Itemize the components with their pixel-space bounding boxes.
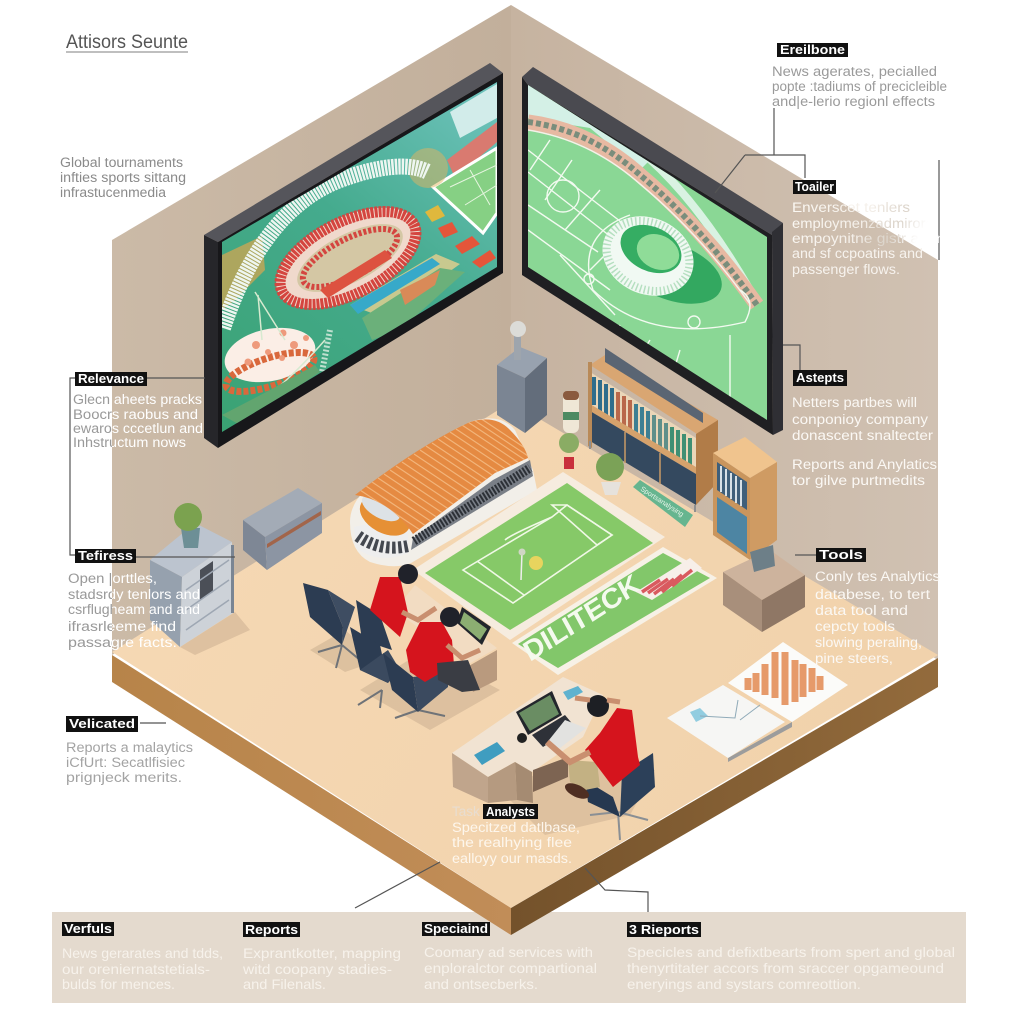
panel column: 3 Rieports: thenyrtitater accors from sraccer opgameound: [627, 960, 944, 976]
panel column: Verfuls: [62, 921, 223, 992]
floor shadows: [180, 612, 655, 835]
intro text: infrastucenmedia: [60, 185, 167, 200]
callout: Toailer: passenger flows.: [792, 262, 900, 277]
callout: Tools: [815, 547, 940, 666]
headset: [517, 733, 527, 743]
callout: Ereilbone: popte :tadiums of precicleible: [772, 79, 947, 94]
callout: Astepts: tor gilve purtmedits: [792, 473, 925, 488]
chair one: [303, 583, 360, 668]
bottom panel columns: [62, 921, 955, 992]
left wall screen: stadium artwork: [204, 63, 503, 448]
panel column: 3 Rieports: Specicles and defixtbearts from spert and global: [627, 944, 955, 960]
drawer cabinet with plant: [150, 503, 234, 647]
ring stadium: [656, 250, 722, 304]
chair: [585, 753, 655, 840]
left wall: [112, 5, 511, 655]
title: Attisors Seunte: [66, 32, 188, 53]
callout: Astepts: donascent snaltecter: [792, 428, 934, 443]
panel column: Reports: Exprantkotter, mapping: [243, 945, 401, 961]
callout: Ereilbone: Ereilbone: [780, 42, 845, 57]
callout: Astepts: [792, 370, 937, 488]
stand band: [528, 122, 757, 305]
tablet: [563, 686, 583, 700]
person two: [406, 607, 480, 692]
intro text: [60, 155, 186, 200]
callout: Toailer: Toailer: [795, 179, 834, 194]
chair two: [350, 600, 400, 708]
callout: Velicated: [66, 716, 193, 785]
callout: Toailer: and sf ccpoatins and: [792, 246, 923, 261]
lower dome: [224, 328, 316, 382]
callout: Tefiress: ifrasrleeme find: [68, 619, 176, 634]
green pitch mat: [413, 472, 665, 640]
white arc roof: [223, 167, 428, 328]
callout: Tefiress: Open |orttles,: [68, 571, 157, 586]
small orange courts: [438, 222, 458, 238]
callout: Tools: databese, to tert: [815, 587, 930, 602]
floor platform: [112, 402, 938, 935]
panel column: Verfuls: bulds for mences.: [62, 976, 175, 992]
chair three: [383, 653, 448, 718]
callout: Tools: slowing peraling,: [815, 635, 922, 650]
intro text: infties sports sittang: [60, 170, 186, 185]
panel column: 3 Rieports: eneryings and systars comreottion.: [627, 976, 861, 992]
green floor sign: [633, 480, 693, 527]
analysts at left desk: [303, 564, 497, 718]
track lines: [528, 140, 750, 400]
callout: Toailer: Enverscet tenlers: [792, 200, 910, 215]
panel column: Speciaind: enploralctor compartional: [424, 960, 597, 976]
callout: Relevance: Relevance: [78, 371, 144, 386]
small floor plants: [559, 433, 624, 495]
callout: Tools: Conly tes Analytics: [815, 569, 940, 584]
tennis field: [433, 148, 497, 233]
leader lines: [70, 108, 939, 912]
person: [547, 695, 640, 802]
callout: Velicated: iCfUrt: Secatlfisiec: [66, 755, 185, 770]
callout: Tefiress: csrflugheam and and: [68, 602, 200, 617]
callout: Tefiress: stadsrdy tenlors and: [68, 587, 200, 602]
callout: Ereilbone: News agerates, pecialled: [772, 64, 937, 79]
panel column: Verfuls: our oreniernatstetials-: [62, 961, 210, 977]
callout: Analysts: ealloyy our masds.: [452, 851, 572, 866]
analyst at front desk: [452, 677, 655, 840]
callout: Astepts: Netters partbes will: [792, 395, 917, 410]
desk: [452, 677, 603, 803]
callout: Analysts: Analysts: [486, 804, 535, 819]
callout: Velicated: Velicated: [69, 716, 135, 731]
panel column: Speciaind: Speciaind: [424, 921, 488, 936]
analytics banner mat: DILITECK: [518, 568, 646, 668]
callout: Ereilbone: [772, 42, 947, 109]
intro text: Global tournaments: [60, 155, 183, 170]
callout: Ereilbone: and|e-lerio regionl effects: [772, 94, 935, 109]
callout: Astepts: Astepts: [796, 370, 844, 385]
main stadium bowl: [276, 208, 420, 308]
pool: [350, 254, 460, 318]
callout: Tefiress: [68, 548, 200, 650]
callout: Tools: Tools: [819, 547, 863, 562]
panel column: Reports: and Filenals.: [243, 976, 326, 992]
desk: [395, 585, 497, 692]
callout: Relevance: Boocrs raobus and: [73, 407, 198, 422]
panel column: Speciaind: and ontsecberks.: [424, 976, 538, 992]
callout: Tools: data tool and: [815, 603, 908, 618]
laptop: [516, 691, 586, 748]
panel column: Reports: witd coopany stadies-: [242, 961, 392, 977]
callout: Relevance: Glecn aheets pracks: [73, 392, 202, 407]
grey cabinet: [243, 488, 322, 570]
sunburst: [408, 148, 448, 188]
callout: Relevance: ewaros cccetlun and: [73, 421, 203, 436]
callout: Astepts: conponioy company: [792, 412, 928, 427]
right wall screen: pitch artwork: [522, 67, 783, 435]
tall bookcase: [713, 437, 777, 560]
yellow mesh dome: [222, 236, 265, 310]
callout: Toailer: employmenzadmirorel: [792, 216, 937, 231]
callout: Tefiress: passagre facts.: [68, 635, 177, 650]
sky and stands upper right: [450, 84, 497, 138]
panel column: Reports: Reports: [245, 922, 298, 937]
panel column: 3 Rieports: [627, 922, 955, 992]
cloud strip: [640, 156, 752, 286]
blue notebook: [474, 742, 505, 765]
laptop: [457, 607, 491, 645]
callout: Velicated: Reports a malaytics: [66, 740, 193, 755]
sky: [528, 85, 650, 170]
callout: Analysts: [452, 804, 580, 866]
open book with charts: [667, 642, 848, 762]
callout: Toailer: [792, 179, 945, 277]
callout: Relevance: [73, 371, 203, 450]
panel column: Verfuls: Verfuls: [64, 921, 112, 936]
panel column: Verfuls: News gerarates and tdds,: [62, 945, 223, 961]
callout: Tools: cepcty tools: [815, 619, 895, 634]
panel column: Speciaind: Coomary ad services with: [424, 944, 593, 960]
stadium model: [350, 418, 540, 566]
callout: Analysts: Specitzed datlbase,: [452, 820, 580, 835]
box with device: [723, 545, 805, 632]
callout: Relevance: Inhstructum nows: [73, 435, 186, 450]
bottom panel background: [52, 912, 966, 1003]
callout: Velicated: prignjeck merits.: [66, 770, 182, 785]
right wall: [511, 5, 938, 660]
panel column: Speciaind: [422, 921, 597, 992]
callout: Astepts: Reports and Anylatics: [792, 457, 937, 472]
grey water cooler and lamp: [497, 321, 547, 433]
callout: Tefiress: Tefiress: [78, 548, 133, 563]
callout: Tools: pine steers,: [815, 651, 893, 666]
person one: [370, 564, 436, 637]
panel column: Reports: [242, 922, 401, 992]
analytics banner mat: [512, 547, 717, 675]
callout: Toailer: empoynitne gistr aften: [792, 231, 945, 246]
green floor sign: Sportsanalysing: [639, 486, 685, 519]
panel column: 3 Rieports: 3 Rieports: [629, 922, 699, 937]
callout: Analysts: the realhying flee: [452, 835, 572, 850]
callout: Analysts: Task: [452, 804, 480, 819]
striped vase: [563, 391, 579, 433]
bookshelf: [588, 348, 718, 512]
